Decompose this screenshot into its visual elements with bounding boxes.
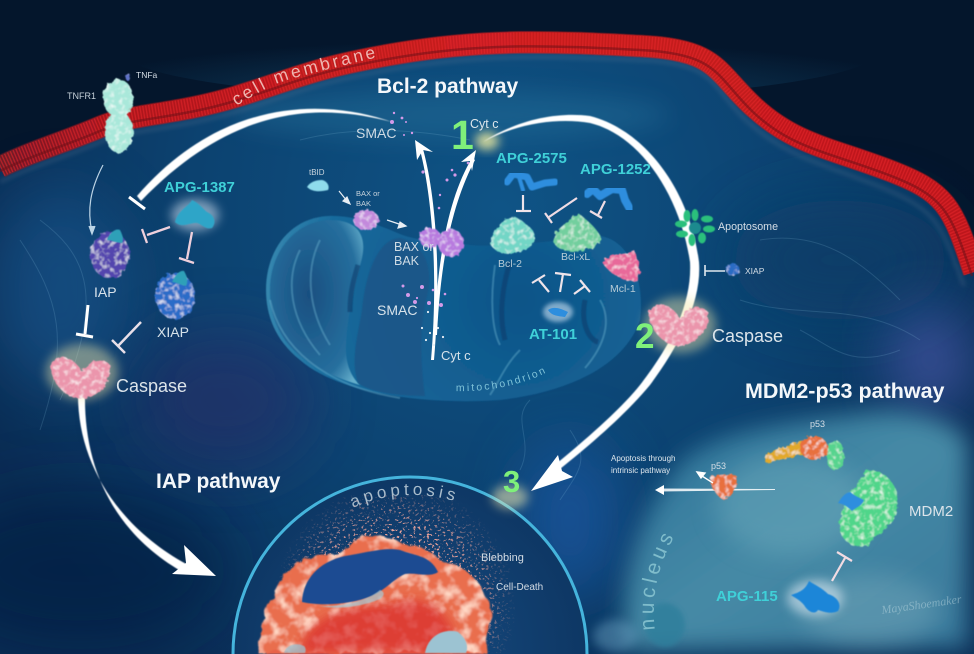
inhibitor: APG-1387 to IAP <box>142 227 170 243</box>
protein: Bcl-xL <box>553 213 602 252</box>
arrow: TNFR1 to IAP <box>89 165 103 234</box>
protein: Bcl-2 <box>490 217 535 254</box>
blebbing label: Blebbing <box>481 552 524 564</box>
text: apoptosis through intrinsic pathway: intrinsic pathway <box>611 466 670 475</box>
label: Mcl-1: Mcl-1 <box>610 283 636 295</box>
arrow: Cyt c release <box>434 150 476 335</box>
protein: XIAP small <box>726 264 740 276</box>
drug: APG-1387 molecule <box>171 199 219 231</box>
arrow: SMAC release <box>415 140 437 360</box>
drug: APG-1252 molecule <box>587 189 630 209</box>
apoptosis label: apoptosis <box>351 484 455 507</box>
arrow: p53 upward <box>697 472 713 483</box>
arrow: SMAC to IAP inhibition <box>129 109 392 209</box>
arrow: tBID to BAX <box>339 191 350 204</box>
step number 1: 1 <box>451 112 474 158</box>
label: Caspase right: Caspase <box>712 326 783 346</box>
inhibitor: AT-101 to Mcl-1 <box>574 280 590 294</box>
molecule: TNFR1 receptor with TNFa <box>103 73 133 153</box>
inhibitor: AT-101 to Bcl-xL <box>555 273 571 292</box>
label: XIAP: XIAP <box>157 324 189 340</box>
protein: BAX or BAK pore <box>419 228 464 257</box>
drug label: APG-1387: APG-1387 <box>164 179 235 196</box>
large arrow: caspase to apoptosis <box>78 395 216 576</box>
inhibitor: XIAP to apoptosome <box>705 265 725 276</box>
heading: IAP pathway: IAP pathway <box>156 470 281 493</box>
protein: XIAP <box>155 271 195 319</box>
label: Caspase left: Caspase <box>116 376 187 396</box>
inhibitor: APG-115 to MDM2 <box>832 552 852 581</box>
mitochondrion <box>266 216 641 402</box>
inhibitor: IAP to caspase <box>76 305 93 337</box>
apoptosis dome <box>232 476 588 654</box>
label: TNFR1: TNFR1 <box>67 91 96 101</box>
drug: APG-115 molecule <box>787 580 843 616</box>
label: Cyt c mitochondrion: Cyt c <box>441 348 471 363</box>
drug: AT-101 molecule <box>543 302 573 322</box>
label: BAX or BAK: BAX or <box>394 240 434 254</box>
label: Cyt c top: Cyt c <box>470 117 498 131</box>
step number 2: 2 <box>635 317 654 356</box>
protein: IAP <box>90 229 130 278</box>
label: SMAC mitochondrion: SMAC <box>377 302 417 318</box>
cell death label: Cell-Death <box>496 582 543 593</box>
protein: caspase right <box>644 297 716 353</box>
label: Bcl-xL: Bcl-xL <box>561 251 590 263</box>
drug: APG-115 bound to MDM2 <box>838 492 864 511</box>
label: Bcl-2: Bcl-2 <box>498 258 522 270</box>
protein: p53 and MDM2 complex <box>765 436 844 470</box>
label: BAX or BAK small: BAK <box>356 199 371 208</box>
label: p53 middle: p53 <box>711 461 726 471</box>
label: SMAC top: SMAC <box>356 125 396 141</box>
mitochondrion label: mitochondrion <box>456 368 546 392</box>
heading: Bcl-2 pathway: Bcl-2 pathway <box>377 75 519 98</box>
drug label: APG-115: APG-115 <box>716 588 778 605</box>
large arc arrow: cyt c to caspase to apoptosis <box>475 115 699 491</box>
apoptotic cell <box>258 535 491 654</box>
label: IAP: IAP <box>94 284 117 300</box>
protein: BAX small <box>353 210 379 230</box>
molecule: tBID <box>307 180 329 191</box>
label: Apoptosome: Apoptosome <box>718 221 778 233</box>
label: BAX or BAK small: BAX or <box>356 189 380 198</box>
protein: p53 active <box>710 474 737 500</box>
text: apoptosis through intrinsic pathway: Apoptosis through <box>611 454 676 463</box>
nucleus label: nucleus <box>642 534 672 630</box>
artist signature: MayaShoemaker <box>879 592 963 617</box>
protein: apoptosome <box>675 209 715 246</box>
inhibitor: APG-1252 to Bcl-xL <box>590 201 605 218</box>
nucleus body <box>590 398 974 654</box>
arrow: p53 to intrinsic pathway <box>655 485 775 495</box>
particles: SMAC and Cyt c dots <box>390 112 469 346</box>
label: BAX or BAK: BAK <box>394 254 420 268</box>
blebbing particles <box>280 495 515 653</box>
label: tBID: tBID <box>309 168 325 177</box>
protein: Mcl-1 <box>602 250 640 282</box>
drug label: APG-2575: APG-2575 <box>496 150 567 167</box>
drug label: APG-1252: APG-1252 <box>580 161 651 178</box>
inhibitor: AT-101 to Bcl-2 <box>532 275 549 292</box>
heading: MDM2-p53 pathway: MDM2-p53 pathway <box>745 379 945 403</box>
inhibitor: XIAP to caspase <box>112 322 141 353</box>
label: MDM2: MDM2 <box>909 503 953 520</box>
label: p53 top: p53 <box>810 419 825 429</box>
inhibitor: APG-2575 to Bcl-2 <box>516 195 531 211</box>
label: TNFa: TNFa <box>136 70 158 80</box>
protein: MDM2 <box>840 471 898 547</box>
arrow: BAX translocation <box>387 220 406 228</box>
inhibitor: APG-1252 to Bcl-2 <box>545 198 577 223</box>
protein: caspase left <box>46 344 118 400</box>
label: XIAP small: XIAP <box>745 266 765 276</box>
inhibitor: APG-1387 to XIAP <box>179 232 194 263</box>
step number 3: 3 <box>503 464 520 499</box>
cell membrane label: cell membrane <box>234 49 375 104</box>
drug: APG-2575 molecule <box>507 174 555 190</box>
drug label: AT-101: AT-101 <box>529 326 577 343</box>
